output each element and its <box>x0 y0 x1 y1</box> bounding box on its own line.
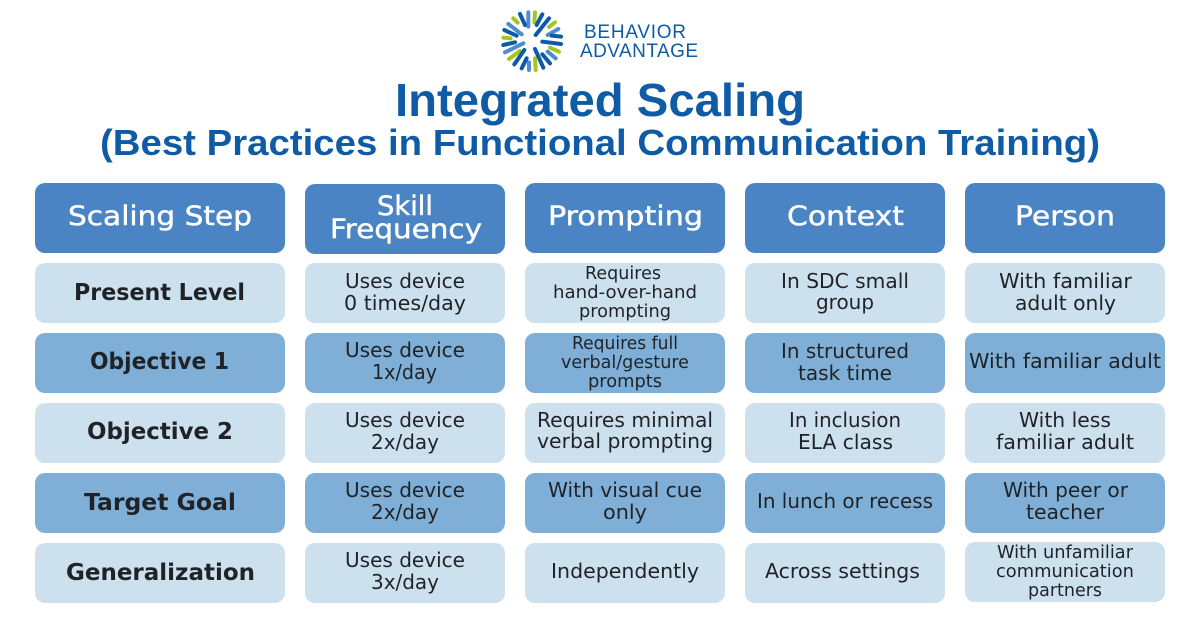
context: present level: In SDC small <box>781 269 909 293</box>
logo wordmark: BEHAVIOR <box>584 22 686 43</box>
context: objective 1: In structured <box>781 339 909 363</box>
header: Context <box>745 183 945 253</box>
step: Target Goal <box>35 473 285 533</box>
step: Target Goal: Target Goal <box>84 488 236 516</box>
frequency: target goal: Uses device <box>345 478 465 502</box>
prompting: present level: hand-over-hand <box>553 283 697 303</box>
person: objective 2: familiar adult <box>996 430 1134 454</box>
person: target goal <box>965 473 1165 533</box>
title: (Best Practices in Functional Communication Training) <box>100 122 1100 163</box>
person: objective 1 <box>965 333 1165 393</box>
context: objective 1: task time <box>798 361 892 385</box>
header: Skill Frequency <box>305 184 505 254</box>
prompting: present level <box>525 263 725 323</box>
prompting: objective 2: Requires minimal <box>537 408 713 432</box>
step: Objective 2: Objective 2 <box>87 417 233 445</box>
frequency: objective 1 <box>305 333 505 393</box>
prompting: target goal: only <box>603 500 647 524</box>
frequency: objective 2: Uses device <box>345 408 465 432</box>
person: generalization <box>965 542 1165 602</box>
person: objective 1: With familiar adult <box>969 349 1161 373</box>
frequency: generalization: 3x/day <box>371 570 439 594</box>
person: present level: adult only <box>1015 291 1116 315</box>
frequency: objective 2: 2x/day <box>371 430 439 454</box>
frequency: present level <box>305 263 505 323</box>
header: Skill Frequency: Frequency <box>330 214 482 245</box>
title <box>100 74 1100 163</box>
context: objective 2: In inclusion <box>789 408 901 432</box>
context: objective 2: ELA class <box>798 430 893 454</box>
frequency: generalization <box>305 543 505 603</box>
person: generalization: partners <box>1028 581 1102 601</box>
header: Skill Frequency: Skill <box>377 191 433 222</box>
context: present level: group <box>816 290 874 314</box>
frequency: objective 1: Uses device <box>345 338 465 362</box>
person: objective 2: With less <box>1019 408 1111 432</box>
prompting: objective 2 <box>525 403 725 463</box>
frequency: present level: Uses device <box>345 269 465 293</box>
prompting: present level: prompting <box>579 302 671 322</box>
prompting: objective 2: verbal prompting <box>537 429 713 453</box>
header: Prompting: Prompting <box>548 201 703 232</box>
person: present level: With familiar <box>999 269 1133 293</box>
step: Present Level <box>35 263 285 323</box>
prompting: objective 1: verbal/gesture <box>561 353 689 373</box>
header: Person: Person <box>1015 201 1115 232</box>
step: Generalization: Generalization <box>66 558 255 586</box>
prompting: target goal: With visual cue <box>548 478 702 502</box>
frequency: generalization: Uses device <box>345 548 465 572</box>
frequency: objective 1: 1x/day <box>372 360 437 384</box>
prompting: target goal <box>525 473 725 533</box>
logo: Behavior Advantage <box>503 12 698 70</box>
title: Integrated Scaling <box>395 74 805 126</box>
prompting: objective 1: Requires full <box>572 334 678 354</box>
prompting: present level: Requires <box>585 264 661 284</box>
header: Person <box>965 183 1165 253</box>
step: Present Level: Present Level <box>74 278 245 306</box>
person: objective 2 <box>965 403 1165 463</box>
step: Generalization <box>35 543 285 603</box>
icon: radial burst <box>503 12 561 70</box>
header: Context: Context <box>787 201 904 232</box>
step: Objective 1: Objective 1 <box>90 347 229 375</box>
context: generalization <box>745 543 945 603</box>
person: target goal: With peer or <box>1003 478 1129 502</box>
context: objective 2 <box>745 403 945 463</box>
context: target goal: In lunch or recess <box>757 489 933 513</box>
prompting: objective 1 <box>525 333 725 393</box>
step: Objective 1 <box>35 333 285 393</box>
logo wordmark <box>580 22 698 62</box>
header: Prompting <box>525 183 725 253</box>
logo wordmark: ADVANTAGE <box>580 41 698 62</box>
context: objective 1 <box>745 333 945 393</box>
header: Scaling Step <box>35 183 285 253</box>
person: generalization: communication <box>996 562 1134 582</box>
step: Objective 2 <box>35 403 285 463</box>
frequency: present level: 0 times/day <box>344 291 466 315</box>
header: Scaling Step: Scaling Step <box>68 201 252 232</box>
prompting: objective 1: prompts <box>588 372 662 392</box>
prompting: generalization: Independently <box>551 559 699 583</box>
person: target goal: teacher <box>1026 500 1105 524</box>
frequency: target goal <box>305 473 505 533</box>
context: target goal <box>745 473 945 533</box>
context: generalization: Across settings <box>765 559 920 583</box>
frequency: objective 2 <box>305 403 505 463</box>
context: present level <box>745 263 945 323</box>
prompting: generalization <box>525 543 725 603</box>
person: present level <box>965 263 1165 323</box>
person: generalization: With unfamiliar <box>997 543 1134 563</box>
table: scaling matrix <box>35 183 1165 603</box>
frequency: target goal: 2x/day <box>371 500 439 524</box>
